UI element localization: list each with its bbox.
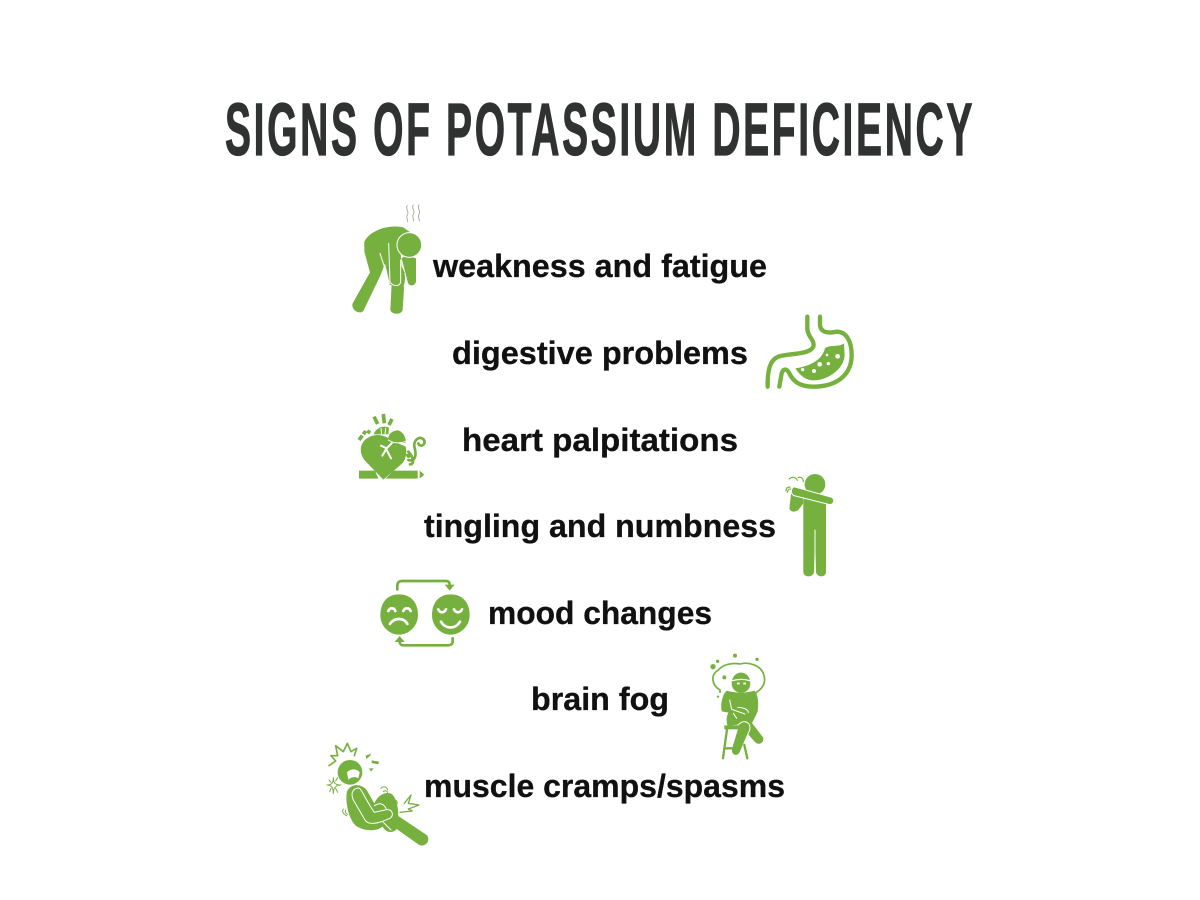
label: tingling and numbness: tingling and numbness	[424, 508, 776, 544]
label: brain fog: brain fog	[531, 681, 669, 717]
icon: seated person with brain fog	[710, 654, 765, 758]
label: heart palpitations: heart palpitations	[462, 422, 738, 458]
label: mood changes: mood changes	[488, 595, 712, 631]
icon: tired bent-over person	[352, 205, 422, 314]
icon: person with tingling arm	[786, 474, 834, 577]
icon: heart	[359, 414, 425, 480]
label: digestive problems: digestive problems	[452, 335, 748, 371]
icon: sad and happy masks	[380, 581, 470, 645]
icon: person with muscle cramp	[327, 743, 428, 845]
icon: stomach	[768, 317, 852, 387]
label: weakness and fatigue: weakness and fatigue	[432, 248, 767, 284]
label: muscle cramps/spasms: muscle cramps/spasms	[424, 768, 785, 804]
